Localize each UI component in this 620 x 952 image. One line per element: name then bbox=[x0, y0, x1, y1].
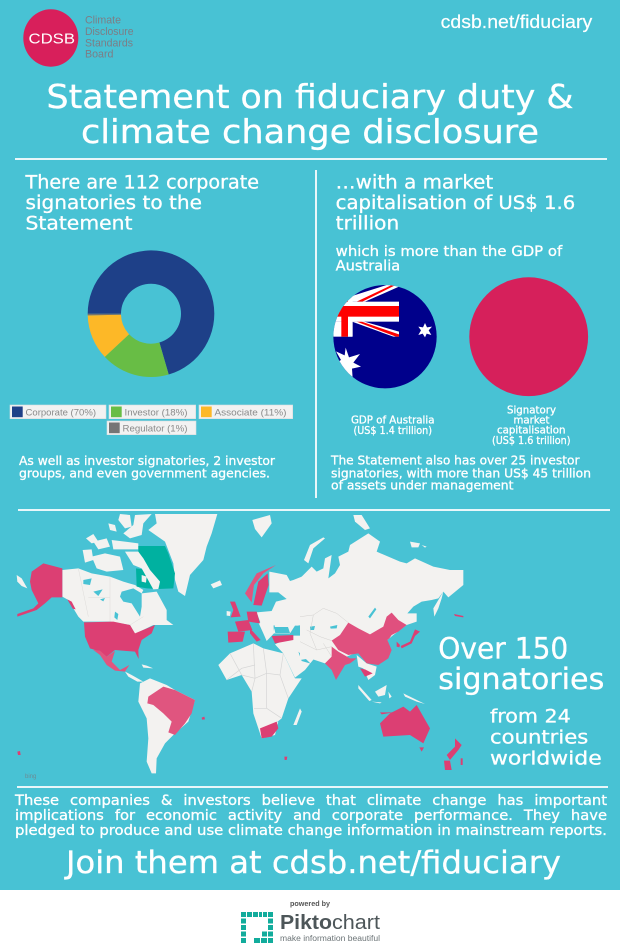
world map bbox=[17, 514, 463, 780]
chart legend: Associate (11%) bbox=[214, 408, 286, 418]
footer: Piktochart: powered by bbox=[290, 899, 331, 908]
heading: corporate signatories bbox=[24, 172, 259, 234]
callout: from 24 countries: from 24 bbox=[490, 706, 571, 728]
circle: signatory market capitalisation bbox=[469, 277, 588, 396]
text: pledge paragraph bbox=[14, 793, 608, 839]
callout: from 24 countries: countries bbox=[490, 726, 588, 748]
header logo: CDSB bbox=[23, 9, 133, 67]
header logo: CDSB: Disclosure bbox=[85, 26, 134, 38]
callout: from 24 countries bbox=[490, 706, 602, 770]
callout: from 24 countries: worldwide bbox=[490, 748, 602, 770]
header link: cdsb.net/fiduciary bbox=[441, 11, 593, 32]
footer: Piktochart bbox=[0, 890, 620, 952]
caption: signatory market capitalisation: market bbox=[514, 414, 550, 426]
caption: signatory market capitalisation: capitalisation bbox=[497, 424, 566, 436]
icon: Piktochart logo bbox=[241, 912, 273, 943]
chart legend: Regulator (1%) bbox=[122, 424, 188, 434]
callout: over 150 signatories: signatories bbox=[438, 662, 604, 696]
footer: Piktochart: make information beautiful bbox=[280, 934, 380, 943]
heading: corporate signatories: signatories to the bbox=[26, 193, 202, 214]
map: North America and Greenland bbox=[17, 514, 217, 634]
footer: Piktochart: chart bbox=[332, 912, 380, 934]
map attribution: bing bbox=[25, 774, 36, 780]
map: South-East Asia and Oceania bbox=[358, 685, 463, 770]
caption: signatory market capitalisation: Signatory bbox=[507, 404, 556, 416]
header logo: CDSB: CDSB bbox=[28, 30, 75, 48]
chart legend bbox=[10, 405, 293, 435]
text: pledge paragraph: pledged to produce and use climate change information in mainstream reports. bbox=[15, 823, 607, 839]
caption: GDP of Australia bbox=[351, 414, 434, 437]
text: investor signatories bbox=[330, 454, 591, 492]
footer: Piktochart: Pikto bbox=[280, 912, 332, 934]
header logo: CDSB: Climate bbox=[85, 14, 121, 26]
heading: market capitalisation bbox=[336, 172, 575, 234]
header logo: CDSB: Board bbox=[85, 48, 114, 60]
text: pledge paragraph: These companies & investors believe that climate change has important bbox=[14, 793, 608, 809]
call to action: Join them at cdsb.net/fiduciary bbox=[64, 845, 561, 881]
text: investor signatories: The Statement also has over 25 investor bbox=[330, 454, 580, 468]
text: pledge paragraph: implications for economic activity and corporate performance. They have bbox=[15, 808, 607, 824]
text: other signatories: As well as investor signatories, 2 investor bbox=[19, 454, 275, 468]
text: investor signatories: signatories, with more than US$ 45 trillion bbox=[331, 466, 591, 480]
chart legend: Investor (18%) bbox=[124, 408, 188, 418]
caption: signatory market capitalisation bbox=[492, 404, 570, 447]
map: USA, Latin America, Africa and Europe bbox=[17, 515, 315, 773]
heading: market capitalisation: …with a market bbox=[336, 172, 493, 194]
panel: market capitalisation bbox=[330, 172, 591, 492]
subheading: GDP comparison: which is more than the GDP of bbox=[336, 244, 563, 260]
heading: market capitalisation: trillion bbox=[336, 214, 399, 234]
chart legend: Corporate (70%) bbox=[26, 408, 96, 418]
text: investor signatories: of assets under management bbox=[331, 478, 514, 492]
map: Asia bbox=[300, 515, 463, 680]
caption: signatory market capitalisation: (US$ 1.6 trillion) bbox=[492, 435, 570, 447]
callout: over 150 signatories bbox=[438, 632, 604, 696]
header logo: CDSB: Standards bbox=[85, 38, 133, 50]
panel: corporate signatories bbox=[10, 172, 293, 481]
text: other signatories bbox=[19, 454, 275, 481]
icon: Australian flag circle bbox=[332, 285, 437, 388]
title: climate change disclosure bbox=[81, 112, 539, 151]
heading: corporate signatories: There are 112 corporate bbox=[24, 172, 259, 194]
caption: GDP of Australia: GDP of Australia bbox=[351, 414, 434, 426]
callout: over 150 signatories: Over 150 bbox=[438, 632, 568, 666]
caption: GDP of Australia: (US$ 1.4 trillion) bbox=[354, 425, 432, 437]
subheading: GDP comparison: Australia bbox=[336, 258, 400, 274]
donut chart bbox=[88, 250, 214, 377]
title bbox=[46, 77, 574, 151]
heading: corporate signatories: Statement bbox=[26, 214, 132, 234]
subheading: GDP comparison bbox=[336, 244, 563, 274]
text: other signatories: groups, and even government agencies. bbox=[19, 467, 270, 481]
title: Statement on fiduciary duty & bbox=[46, 77, 574, 116]
heading: market capitalisation: capitalisation of US$ 1.6 bbox=[336, 193, 575, 214]
